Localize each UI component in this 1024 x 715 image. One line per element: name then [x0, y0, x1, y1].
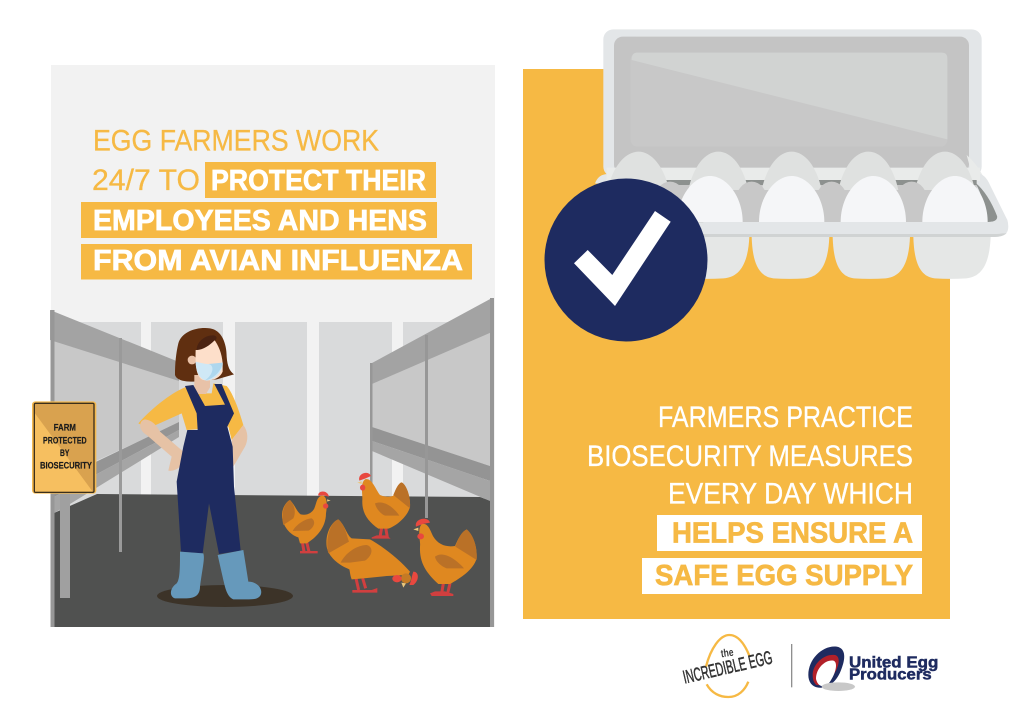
egg carton	[595, 29, 1008, 279]
logo: united egg producers	[808, 647, 938, 691]
logo: united egg producers: United Egg	[849, 655, 938, 672]
sign: farm protected by biosecurity: FARM	[54, 423, 76, 433]
text: farmers practice biosecurity: BIOSECURITY MEASURES	[587, 440, 913, 473]
heading: egg farmers work: 24/7 TO	[92, 164, 200, 197]
farmer	[138, 328, 261, 599]
panel: farm scene	[32, 65, 495, 627]
panel: biosecurity	[523, 69, 950, 619]
sign: farm protected by biosecurity: PROTECTED	[43, 435, 87, 445]
sign: farm protected by biosecurity: BY	[60, 448, 70, 458]
logo: united egg producers: Producers	[849, 666, 932, 683]
heading: egg farmers work: EMPLOYEES AND HENS	[93, 205, 427, 237]
floor	[54, 494, 491, 627]
floor shadow	[157, 585, 293, 607]
text: farmers practice biosecurity	[587, 401, 922, 594]
logo: the incredible egg	[681, 635, 774, 697]
heading: egg farmers work: EGG FARMERS WORK	[93, 124, 379, 158]
heading: egg farmers work: FROM AVIAN INFLUENZA	[93, 245, 463, 277]
right shelving	[370, 298, 494, 627]
text: farmers practice biosecurity: SAFE EGG SUPPLY	[655, 560, 913, 592]
heading: egg farmers work	[81, 124, 472, 280]
sign: farm protected by biosecurity: BIOSECURITY	[40, 460, 93, 470]
hen 3	[326, 519, 418, 593]
text: farmers practice biosecurity: FARMERS PRACTICE	[658, 401, 913, 434]
barn wall panels	[54, 322, 483, 517]
heading: egg farmers work: PROTECT THEIR	[211, 165, 426, 197]
hen 4	[413, 519, 477, 596]
hen 2	[357, 473, 410, 539]
logos	[681, 635, 938, 697]
left shelving	[50, 310, 179, 627]
text: farmers practice biosecurity: EVERY DAY WHICH	[668, 478, 913, 510]
sign: farm protected by biosecurity	[32, 401, 96, 494]
hens	[282, 473, 477, 596]
logo: the incredible egg: INCREDIBLE EGG	[681, 647, 774, 688]
text: farmers practice biosecurity: HELPS ENSURE A	[672, 518, 913, 550]
logo: the incredible egg: the	[720, 647, 734, 660]
icon: check badge	[544, 178, 708, 342]
hen 1	[282, 492, 331, 553]
